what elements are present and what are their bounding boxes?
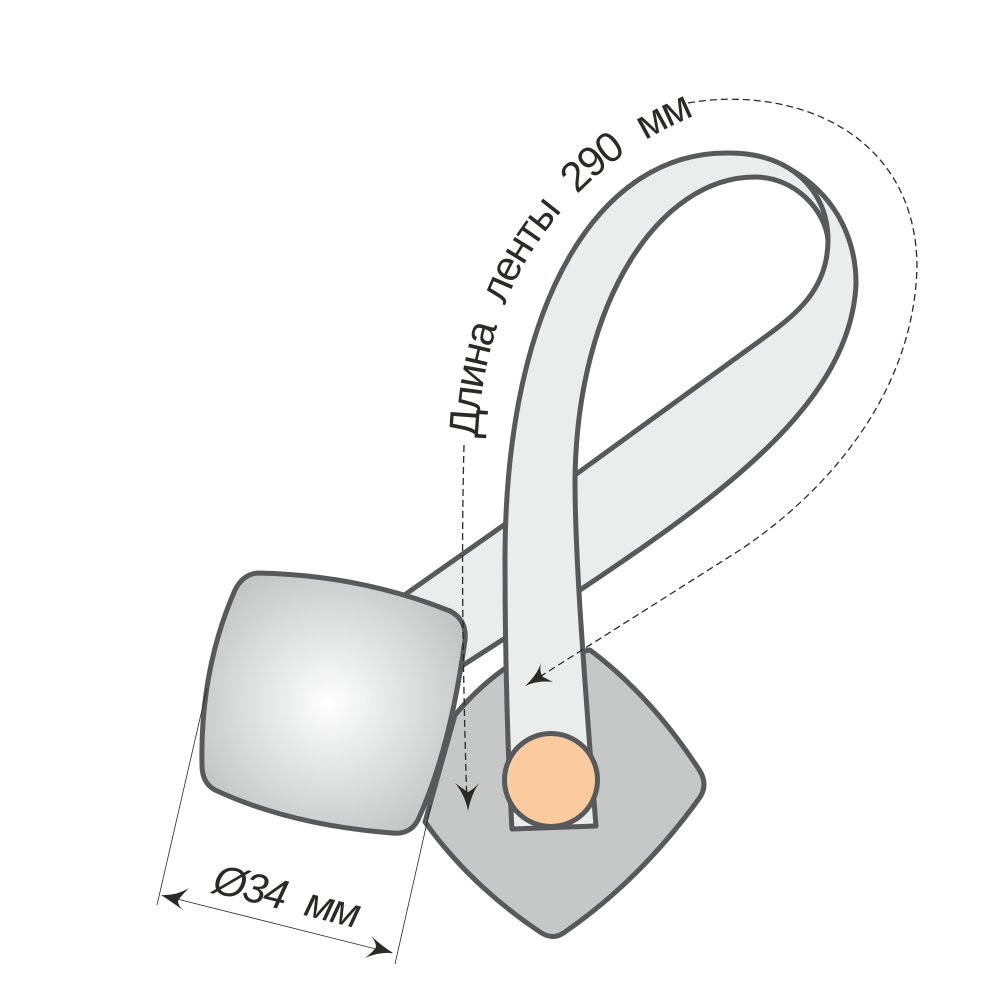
ribbon length label: Длина ленты 290 мм	[450, 96, 692, 438]
peach circular bead	[504, 734, 598, 826]
ribbon front strand	[505, 153, 828, 829]
square knob with radial gradient	[202, 573, 465, 833]
diamond base plate	[425, 650, 704, 936]
diameter label: Ø34 мм	[207, 855, 366, 937]
arrowhead: right	[365, 936, 393, 958]
ribbon length dashed leader down to plate	[463, 445, 467, 805]
arrowhead: ribbon leader	[525, 663, 553, 686]
ribbon back strand	[403, 153, 856, 680]
arrowhead: plate leader	[455, 783, 479, 811]
arrowhead: left	[161, 888, 189, 911]
dimension line	[165, 896, 392, 953]
ribbon length dashed leader to inner ribbon	[530, 99, 917, 683]
extension lines	[157, 688, 431, 964]
diameter dimension	[157, 688, 431, 964]
